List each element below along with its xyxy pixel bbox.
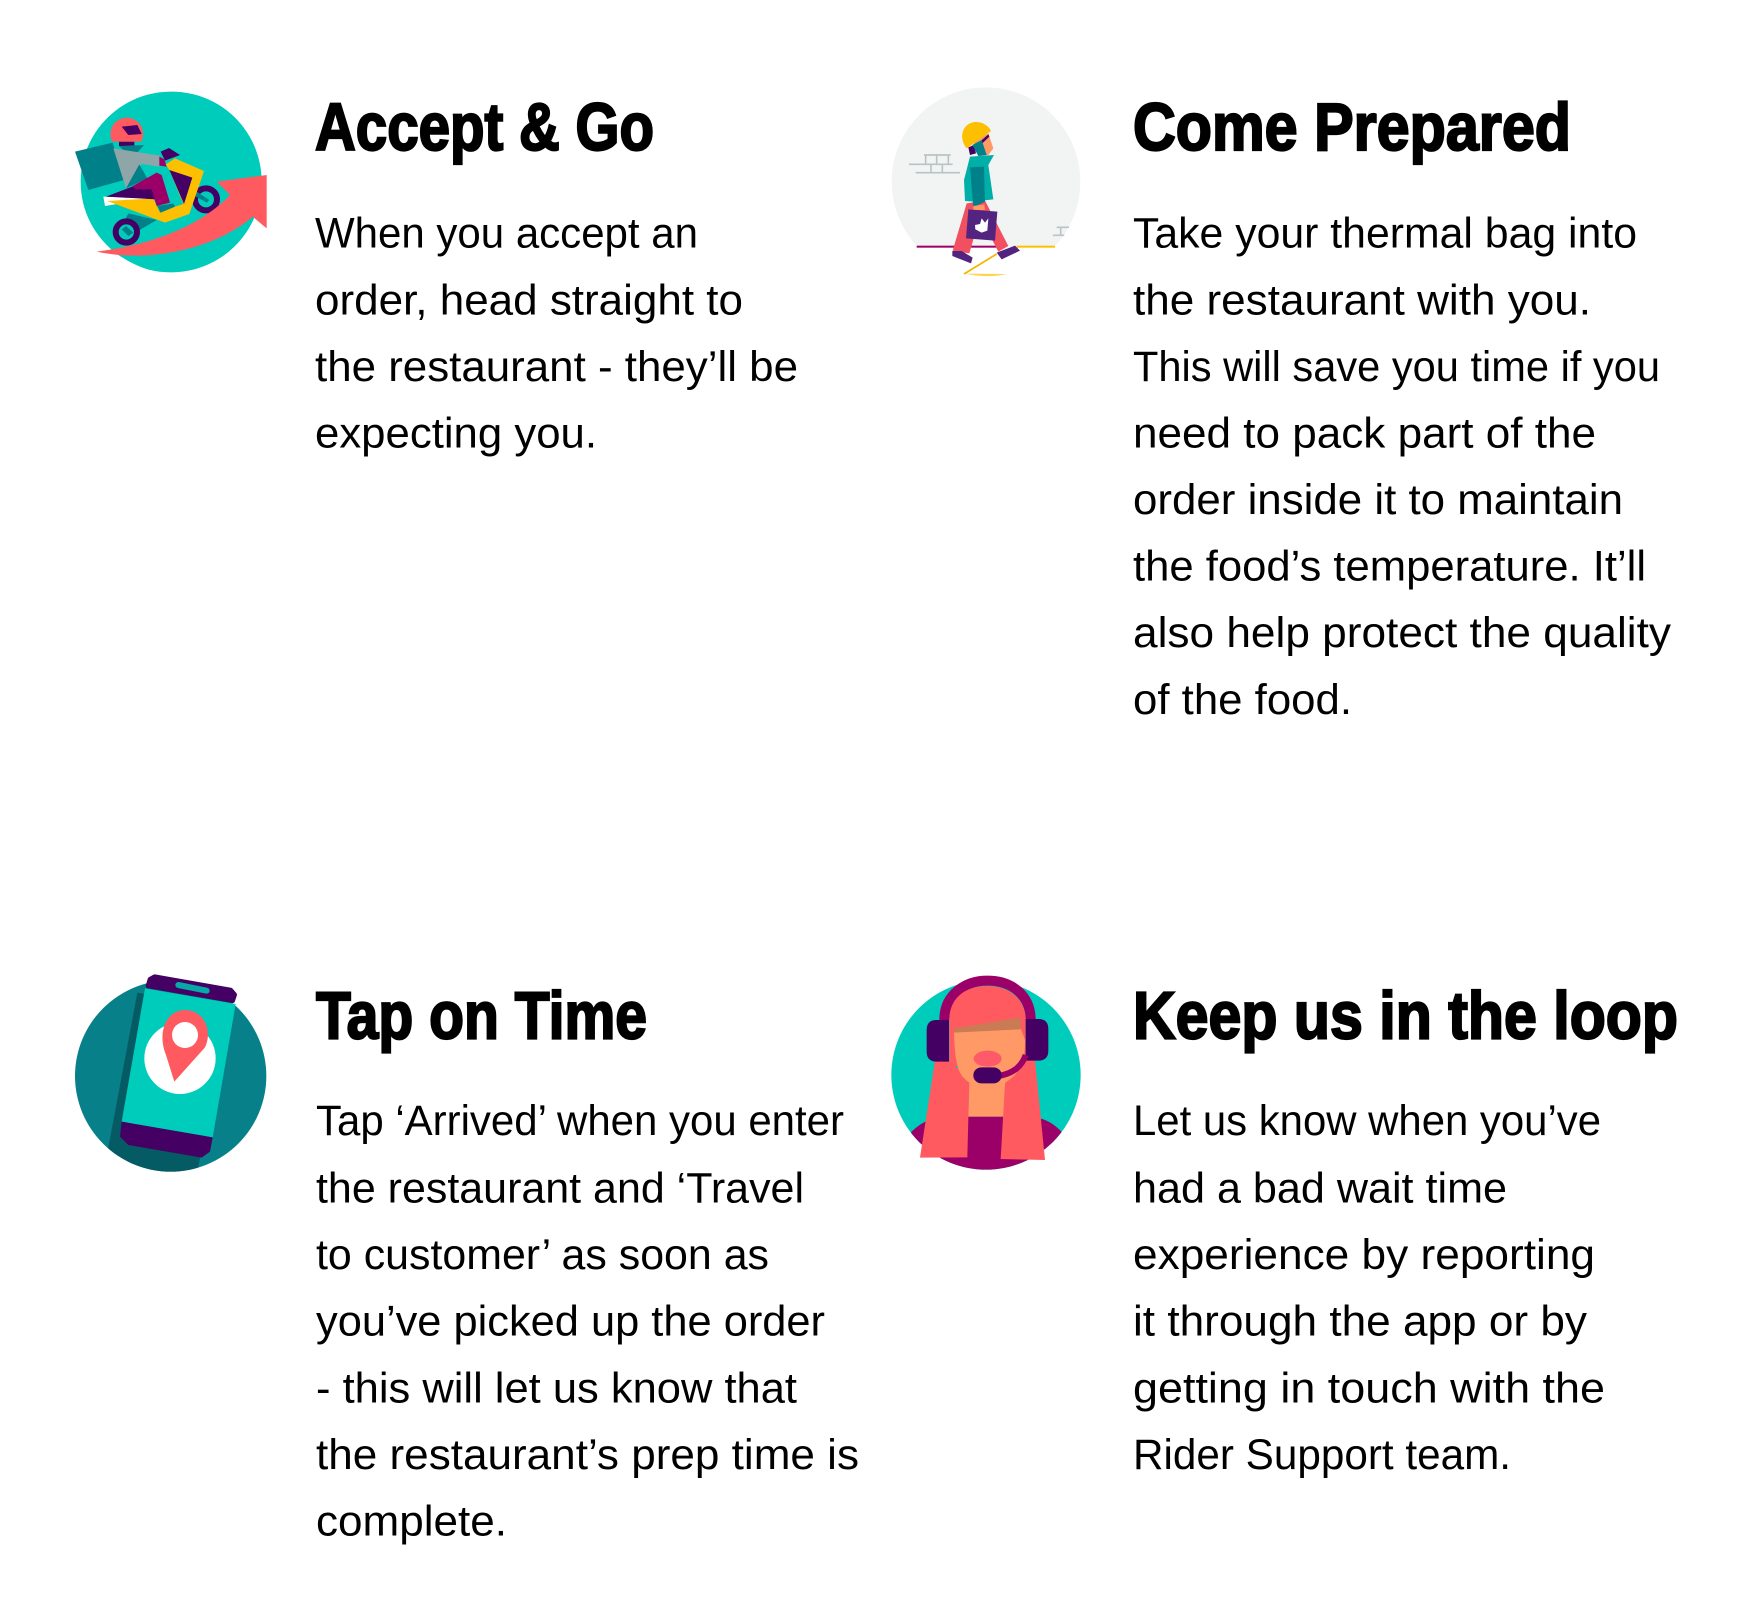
text block: Come Prepared body: also help protect the quality: [1133, 609, 1672, 657]
panel: Tap on Time: [75, 977, 859, 1546]
text block: Come Prepared body: the restaurant with you.: [1133, 276, 1591, 324]
text block: Keep us in the loop body: it through the app or by: [1133, 1298, 1588, 1346]
text block: Come Prepared body: This will save you time if you: [1133, 343, 1660, 391]
text block: Come Prepared body: the food’s temperature. It’ll: [1133, 542, 1646, 590]
text block: Tap on Time body: to customer’ as soon as: [316, 1231, 769, 1279]
panel: Keep us in the loop: [891, 978, 1678, 1479]
text block: Accept & Go body: order, head straight to: [315, 276, 743, 324]
text block: Tap on Time body: Tap ‘Arrived’ when you enter: [316, 1097, 844, 1145]
panel: Accept & Go: [75, 90, 798, 458]
text block: Keep us in the loop body: had a bad wait time: [1133, 1164, 1507, 1212]
text block: Tap on Time body: [316, 1097, 859, 1546]
heading: Accept & Go: Accept & Go: [315, 90, 654, 165]
text block: Tap on Time body: the restaurant and ‘Travel: [316, 1164, 804, 1212]
heading: Keep us in the loop: Keep us in the loop: [1133, 978, 1678, 1053]
panel: Come Prepared: [892, 87, 1672, 724]
text block: Keep us in the loop body: [1133, 1097, 1605, 1479]
text block: Keep us in the loop body: Rider Support team.: [1133, 1431, 1511, 1479]
text block: Tap on Time body: you’ve picked up the order: [316, 1298, 825, 1346]
heading: Tap on Time: Tap on Time: [316, 978, 647, 1053]
text block: Accept & Go body: the restaurant - they’ll be: [315, 343, 798, 391]
text block: Tap on Time body: - this will let us know that: [316, 1364, 797, 1412]
text block: Accept & Go body: [315, 210, 798, 458]
icon: rider walking with thermal bag: [892, 87, 1080, 276]
heading: Come Prepared: Come Prepared: [1133, 90, 1571, 165]
text block: Accept & Go body: When you accept an: [315, 210, 698, 258]
text block: Come Prepared body: Take your thermal bag into: [1133, 210, 1637, 258]
text block: Come Prepared body: need to pack part of the: [1133, 410, 1596, 458]
text block: Keep us in the loop body: experience by reporting: [1133, 1231, 1595, 1279]
icon: rider on scooter with arrow: [75, 92, 267, 272]
text block: Tap on Time body: complete.: [316, 1498, 507, 1546]
text block: Come Prepared body: of the food.: [1133, 676, 1352, 724]
icon: support agent with headset: [891, 980, 1081, 1173]
text block: Come Prepared body: [1133, 210, 1672, 724]
text block: Keep us in the loop body: Let us know when you’ve: [1133, 1097, 1601, 1145]
text block: Tap on Time body: the restaurant’s prep time is: [316, 1431, 859, 1479]
text block: Keep us in the loop body: getting in touch with the: [1133, 1364, 1605, 1412]
text block: Accept & Go body: expecting you.: [315, 410, 597, 458]
icon: phone with map pin: [75, 977, 266, 1193]
text block: Come Prepared body: order inside it to maintain: [1133, 476, 1623, 524]
